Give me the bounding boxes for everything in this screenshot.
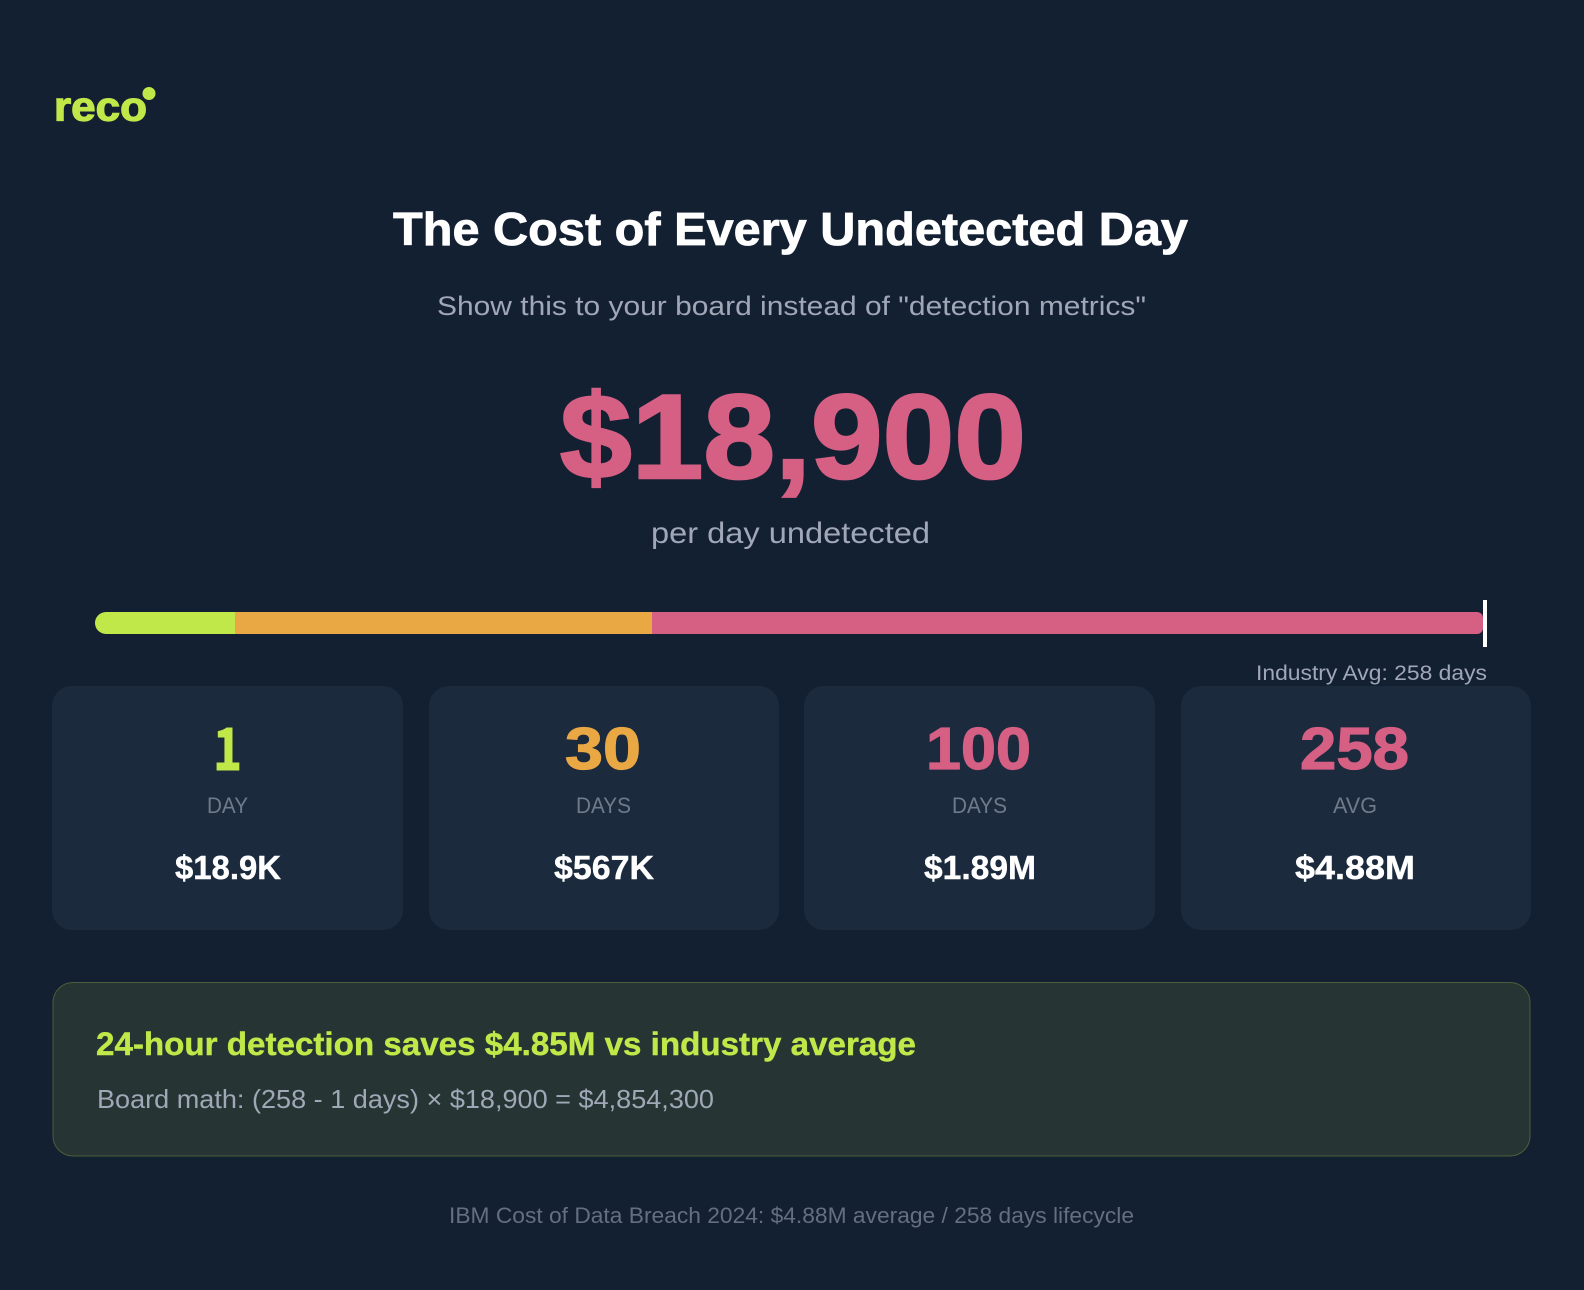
card: 100 days: 100 — [926, 716, 1031, 782]
card: 30 days: DAYS — [576, 793, 631, 818]
card: 100 days: DAYS — [952, 793, 1007, 818]
card: 258 average: $4.88M — [1295, 849, 1415, 886]
callout: savings: Board math: (258 - 1 days) × $18,900 = $4,854,300 — [97, 1084, 714, 1114]
card: 1 day: 1 — [213, 703, 242, 787]
logo: reco: reco — [54, 84, 147, 130]
card: 30 days: $567K — [554, 849, 654, 886]
card: 258 average: AVG — [1333, 793, 1377, 818]
callout: savings — [53, 982, 1530, 1156]
title: The Cost of Every Undetected Day — [393, 203, 1188, 255]
marker label: Industry Avg: 258 days — [1256, 662, 1487, 685]
card: 1 day: $18.9K — [175, 849, 281, 886]
card: 1 day — [52, 686, 403, 930]
headline figure: $18,900 — [560, 370, 1026, 504]
marker: industry average — [1483, 600, 1487, 647]
card: 1 day: DAY — [207, 793, 248, 818]
headline caption: per day undetected — [651, 517, 930, 550]
card: 100 days — [804, 686, 1155, 930]
subtitle: Show this to your board instead of "detection metrics" — [437, 291, 1146, 321]
card: 258 average: 258 — [1300, 716, 1409, 782]
source footnote: IBM Cost of Data Breach 2024: $4.88M average / 258 days lifecycle — [449, 1203, 1134, 1228]
card: 30 days: 30 — [565, 716, 641, 782]
card: 30 days — [429, 686, 779, 930]
card: 100 days: $1.89M — [924, 849, 1036, 886]
timeline bar — [95, 600, 1487, 647]
callout: savings: 24-hour detection saves $4.85M vs industry average — [96, 1026, 916, 1062]
card: 258 average — [1181, 686, 1531, 930]
